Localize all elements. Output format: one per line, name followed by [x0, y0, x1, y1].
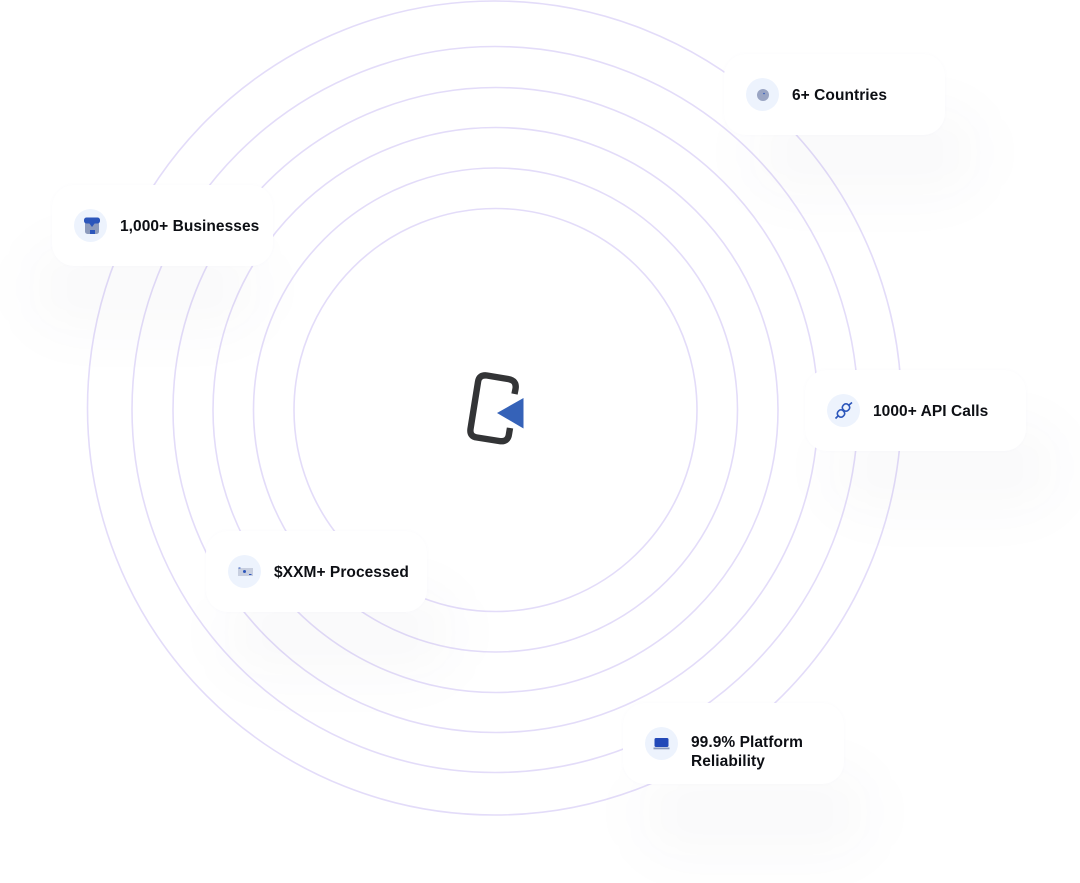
icon: globe: [746, 78, 779, 111]
center logo: [467, 372, 524, 444]
icon: laptop: [645, 727, 678, 760]
icon: banknote: [228, 555, 261, 588]
card: 1000+ API Calls: [805, 370, 1026, 451]
label: 99.9% Platform: [691, 734, 803, 751]
card: 6+ Countries: [724, 54, 945, 135]
card: 1,000+ Businesses: [52, 185, 273, 266]
card: $XXM+ Processed: [206, 531, 427, 612]
label: [691, 734, 803, 770]
icon: storefront: [74, 209, 107, 242]
label: 6+ Countries: [792, 87, 887, 104]
card: 99.9% Platform Reliability: [623, 703, 844, 784]
label: 1,000+ Businesses: [120, 218, 259, 235]
label: Reliability: [691, 753, 765, 770]
icon: plug: [827, 394, 860, 427]
label: 1000+ API Calls: [873, 403, 988, 420]
label: $XXM+ Processed: [274, 564, 409, 581]
